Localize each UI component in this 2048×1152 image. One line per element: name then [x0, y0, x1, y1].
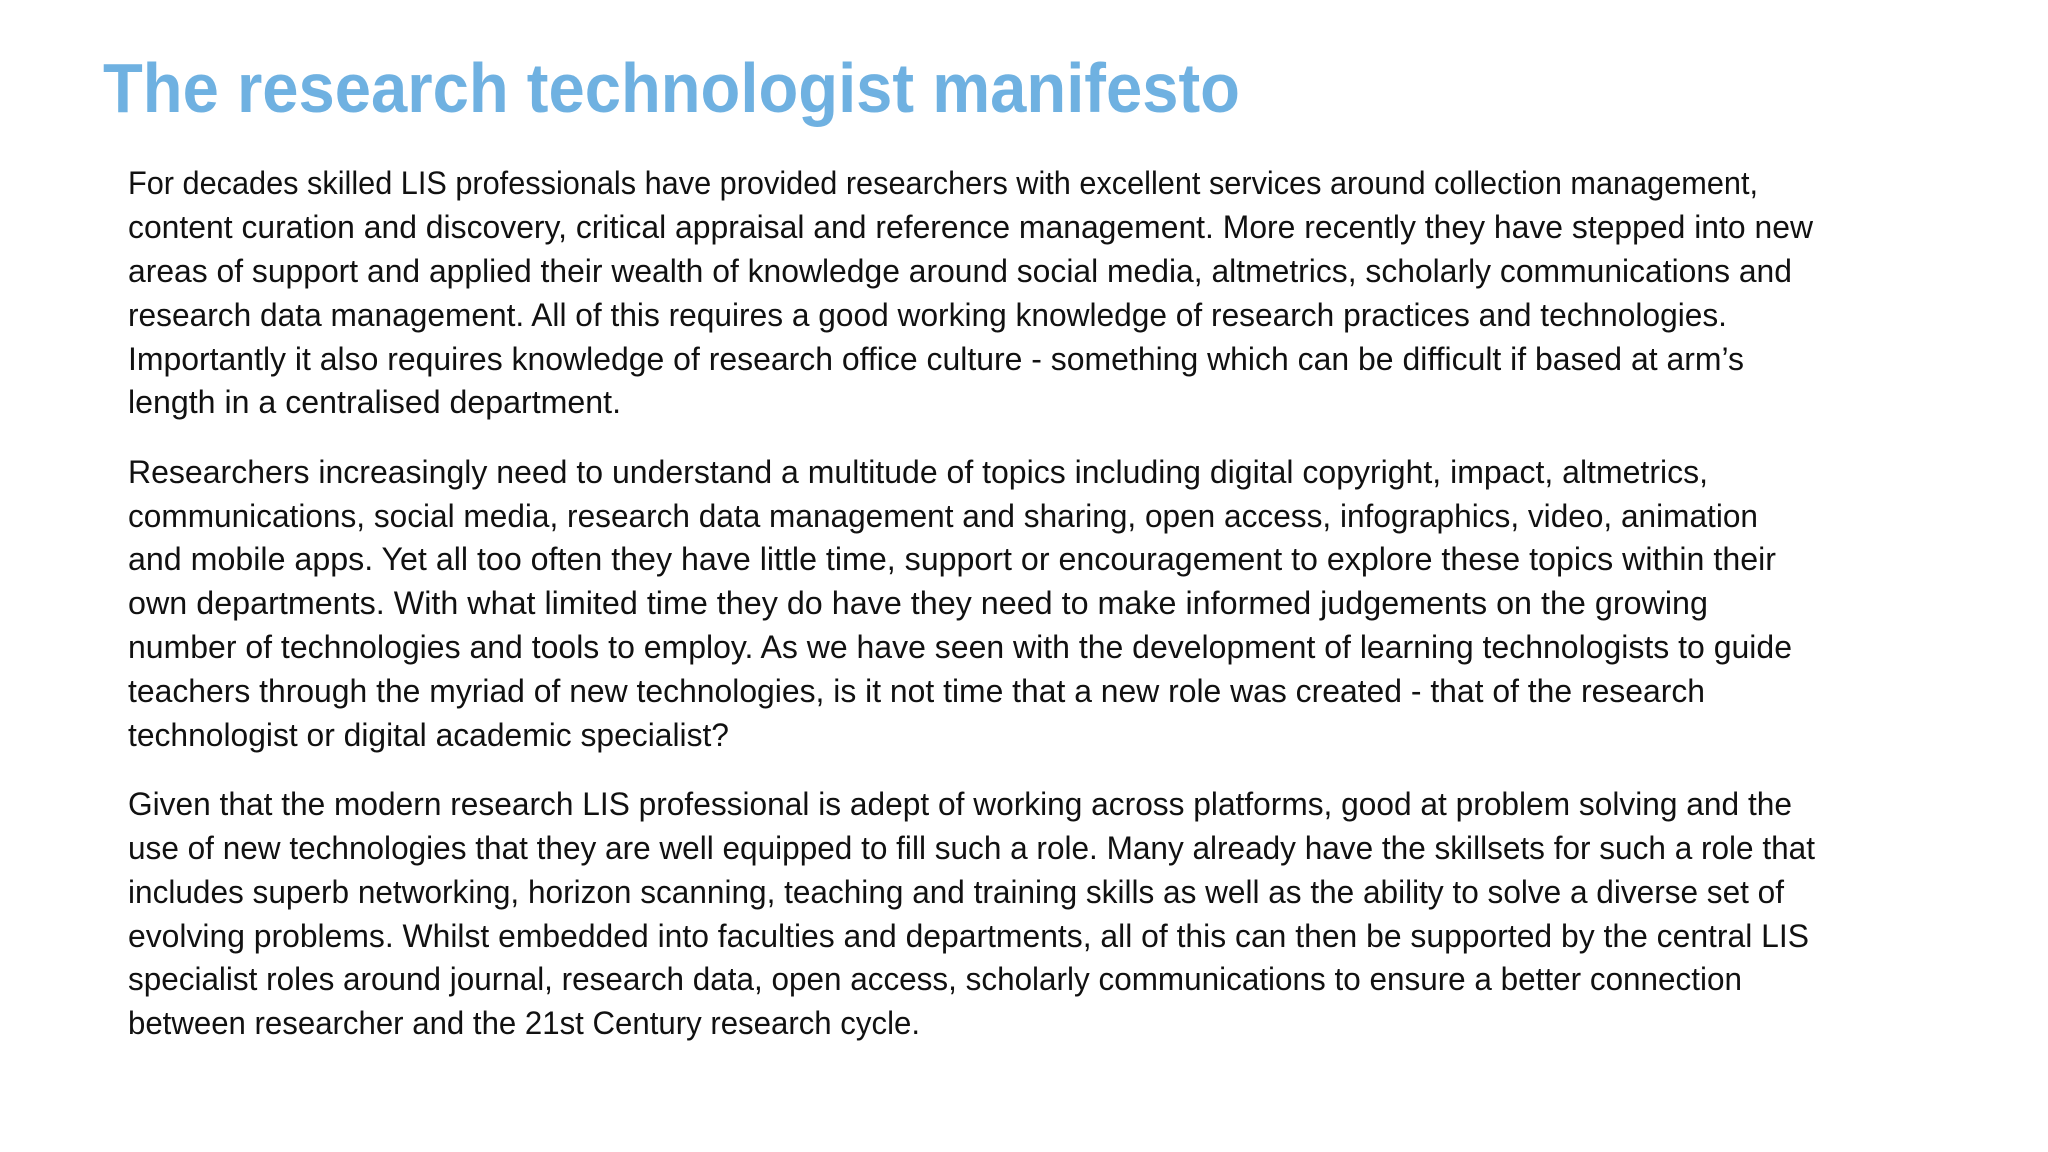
text block: paragraph 1: areas of support and applied their wealth of knowledge around social media, altmetrics, scholarly communications and	[128, 253, 1792, 289]
text block: paragraph 3: evolving problems. Whilst embedded into faculties and departments, all of this can then be supported by the central LIS	[128, 918, 1809, 954]
text block: paragraph 2: teachers through the myriad of new technologies, is it not time that a new role was created - that of the research	[128, 673, 1705, 709]
text block: paragraph 1: length in a centralised department.	[128, 384, 621, 420]
text block: paragraph 2	[128, 454, 1792, 753]
text block: paragraph 1: Importantly it also requires knowledge of research office culture - something which can be difficult if based at arm’s	[128, 341, 1744, 377]
text block: paragraph 2: number of technologies and tools to employ. As we have seen with the development of learning technologists to guide	[128, 629, 1792, 665]
text block: paragraph 3: includes superb networking, horizon scanning, teaching and training skills as well as the ability to solve a diverse set of	[128, 874, 1785, 910]
text block: paragraph 2: own departments. With what limited time they do have they need to make informed judgements on the growing	[128, 585, 1708, 621]
text block: paragraph 3: between researcher and the 21st Century research cycle.	[128, 1005, 920, 1041]
text block: paragraph 2: technologist or digital academic specialist?	[128, 717, 729, 753]
text block: paragraph 2: communications, social media, research data management and sharing, open access, infographics, video, animation	[128, 498, 1758, 534]
text block: paragraph 1: For decades skilled LIS professionals have provided researchers with excellent services around collection management,	[128, 165, 1758, 201]
text block: paragraph 3: specialist roles around journal, research data, open access, scholarly communications to ensure a better connection	[128, 961, 1742, 997]
title: The research technologist manifesto	[103, 49, 1240, 127]
text block: paragraph 3: Given that the modern research LIS professional is adept of working across platforms, good at problem solving and the	[128, 786, 1792, 822]
text block: paragraph 1: content curation and discovery, critical appraisal and reference management. More recently they have stepped into new	[128, 209, 1814, 245]
text block: paragraph 2: Researchers increasingly need to understand a multitude of topics including digital copyright, impact, altmetrics,	[128, 454, 1708, 490]
text block: paragraph 3	[128, 786, 1815, 1041]
text block: paragraph 3: use of new technologies that they are well equipped to fill such a role. Many already have the skillsets for such a role that	[128, 830, 1815, 866]
text block: paragraph 1: research data management. All of this requires a good working knowledge of research practices and technologies.	[128, 297, 1727, 333]
text block: paragraph 1	[128, 165, 1814, 420]
text block: paragraph 2: and mobile apps. Yet all too often they have little time, support or encouragement to explore these topics within their	[128, 541, 1776, 577]
